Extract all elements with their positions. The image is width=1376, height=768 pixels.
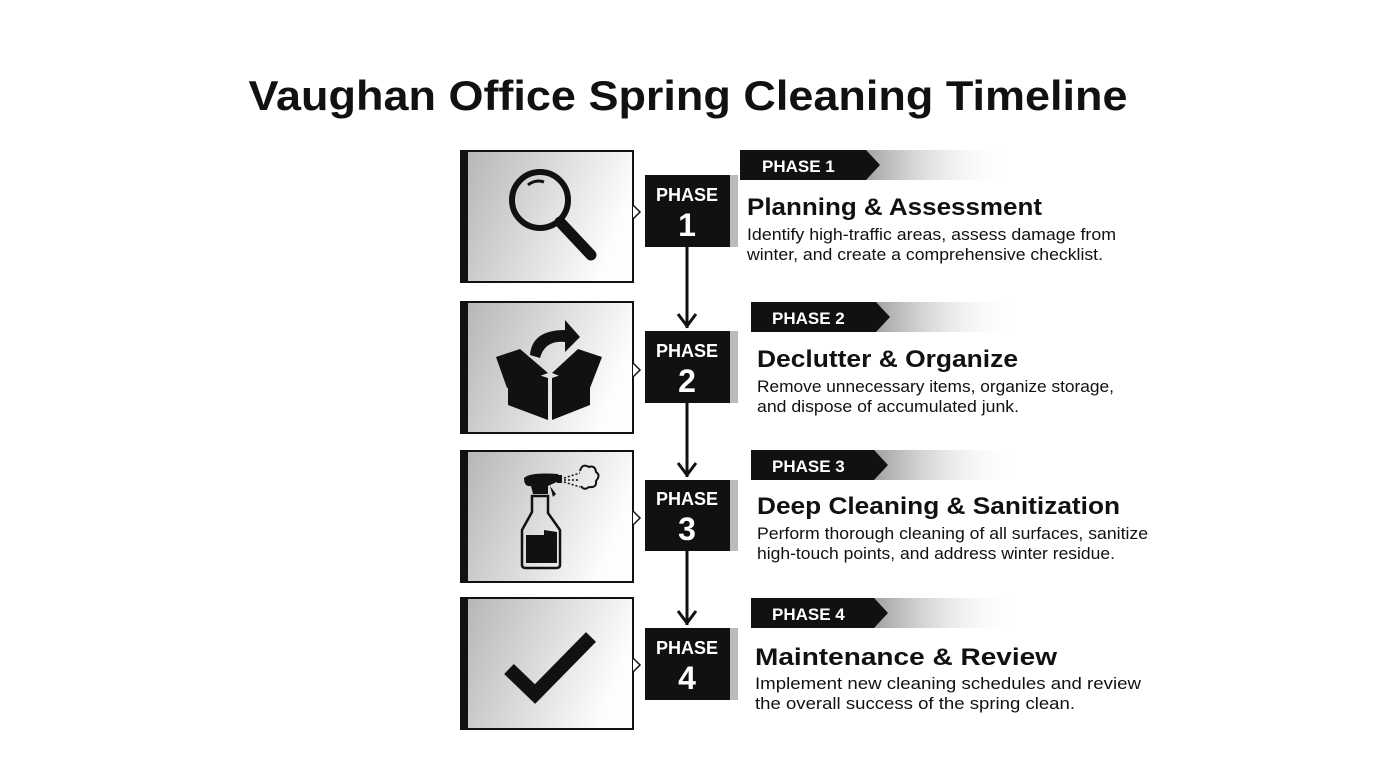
title: Vaughan Office Spring Cleaning Timeline: [248, 72, 1128, 119]
panel: phase 1: [460, 150, 1116, 283]
description 3: high-touch points, and address winter residue.: [757, 544, 1115, 563]
description 4: the overall success of the spring clean.: [755, 694, 1075, 713]
phase box 2: 2: [678, 363, 696, 399]
tag 1: [740, 150, 1010, 180]
phase box 4: PHASE: [656, 638, 718, 658]
connector arrows: [678, 247, 696, 625]
description 1: [746, 225, 1116, 264]
phase box 3: 3: [678, 511, 696, 547]
description 1: winter, and create a comprehensive checklist.: [746, 245, 1103, 264]
heading 2: Declutter & Organize: [757, 346, 1018, 373]
icon box 3: [460, 450, 640, 583]
icon box 1: [460, 150, 640, 283]
heading 4: Maintenance & Review: [755, 644, 1057, 671]
tag 2: PHASE 2: [772, 309, 845, 328]
panel: phase 2: [460, 301, 1114, 434]
description 2: and dispose of accumulated junk.: [757, 397, 1019, 416]
icon box 2: [460, 301, 640, 434]
heading 1: Planning & Assessment: [747, 194, 1042, 221]
icon box 4: [460, 597, 640, 730]
phase box 3: [645, 480, 738, 551]
heading 3: Deep Cleaning & Sanitization: [757, 493, 1120, 520]
panel: phase 3: [460, 450, 1148, 583]
tag 4: [751, 598, 1020, 628]
description 2: [757, 377, 1114, 416]
description 4: [755, 674, 1142, 713]
phase box 3: PHASE: [656, 489, 718, 509]
description 3: [757, 524, 1148, 563]
icon: checkmark: [509, 637, 591, 694]
description 1: Identify high-traffic areas, assess damage from: [747, 225, 1116, 244]
phase box 1: PHASE: [656, 185, 718, 205]
icon: spray bottle: [522, 466, 598, 568]
phase box 4: [645, 628, 738, 700]
tag 3: PHASE 3: [772, 457, 845, 476]
phase box 2: PHASE: [656, 341, 718, 361]
description 3: Perform thorough cleaning of all surfaces, sanitize: [757, 524, 1148, 543]
tag 4: PHASE 4: [772, 605, 845, 624]
phase box 2: [645, 331, 738, 403]
icon: magnifier: [512, 172, 591, 255]
description 2: Remove unnecessary items, organize storage,: [757, 377, 1114, 396]
tag 3: [751, 450, 1020, 480]
tag 1: PHASE 1: [762, 157, 835, 176]
phase box 1: [645, 175, 738, 247]
icon: box with arrow: [496, 320, 602, 420]
tag 2: [751, 302, 1020, 332]
description 4: Implement new cleaning schedules and review: [755, 674, 1142, 693]
phase box 4: 4: [678, 660, 696, 696]
phase box 1: 1: [678, 207, 696, 243]
panel: phase 4: [460, 597, 1142, 730]
